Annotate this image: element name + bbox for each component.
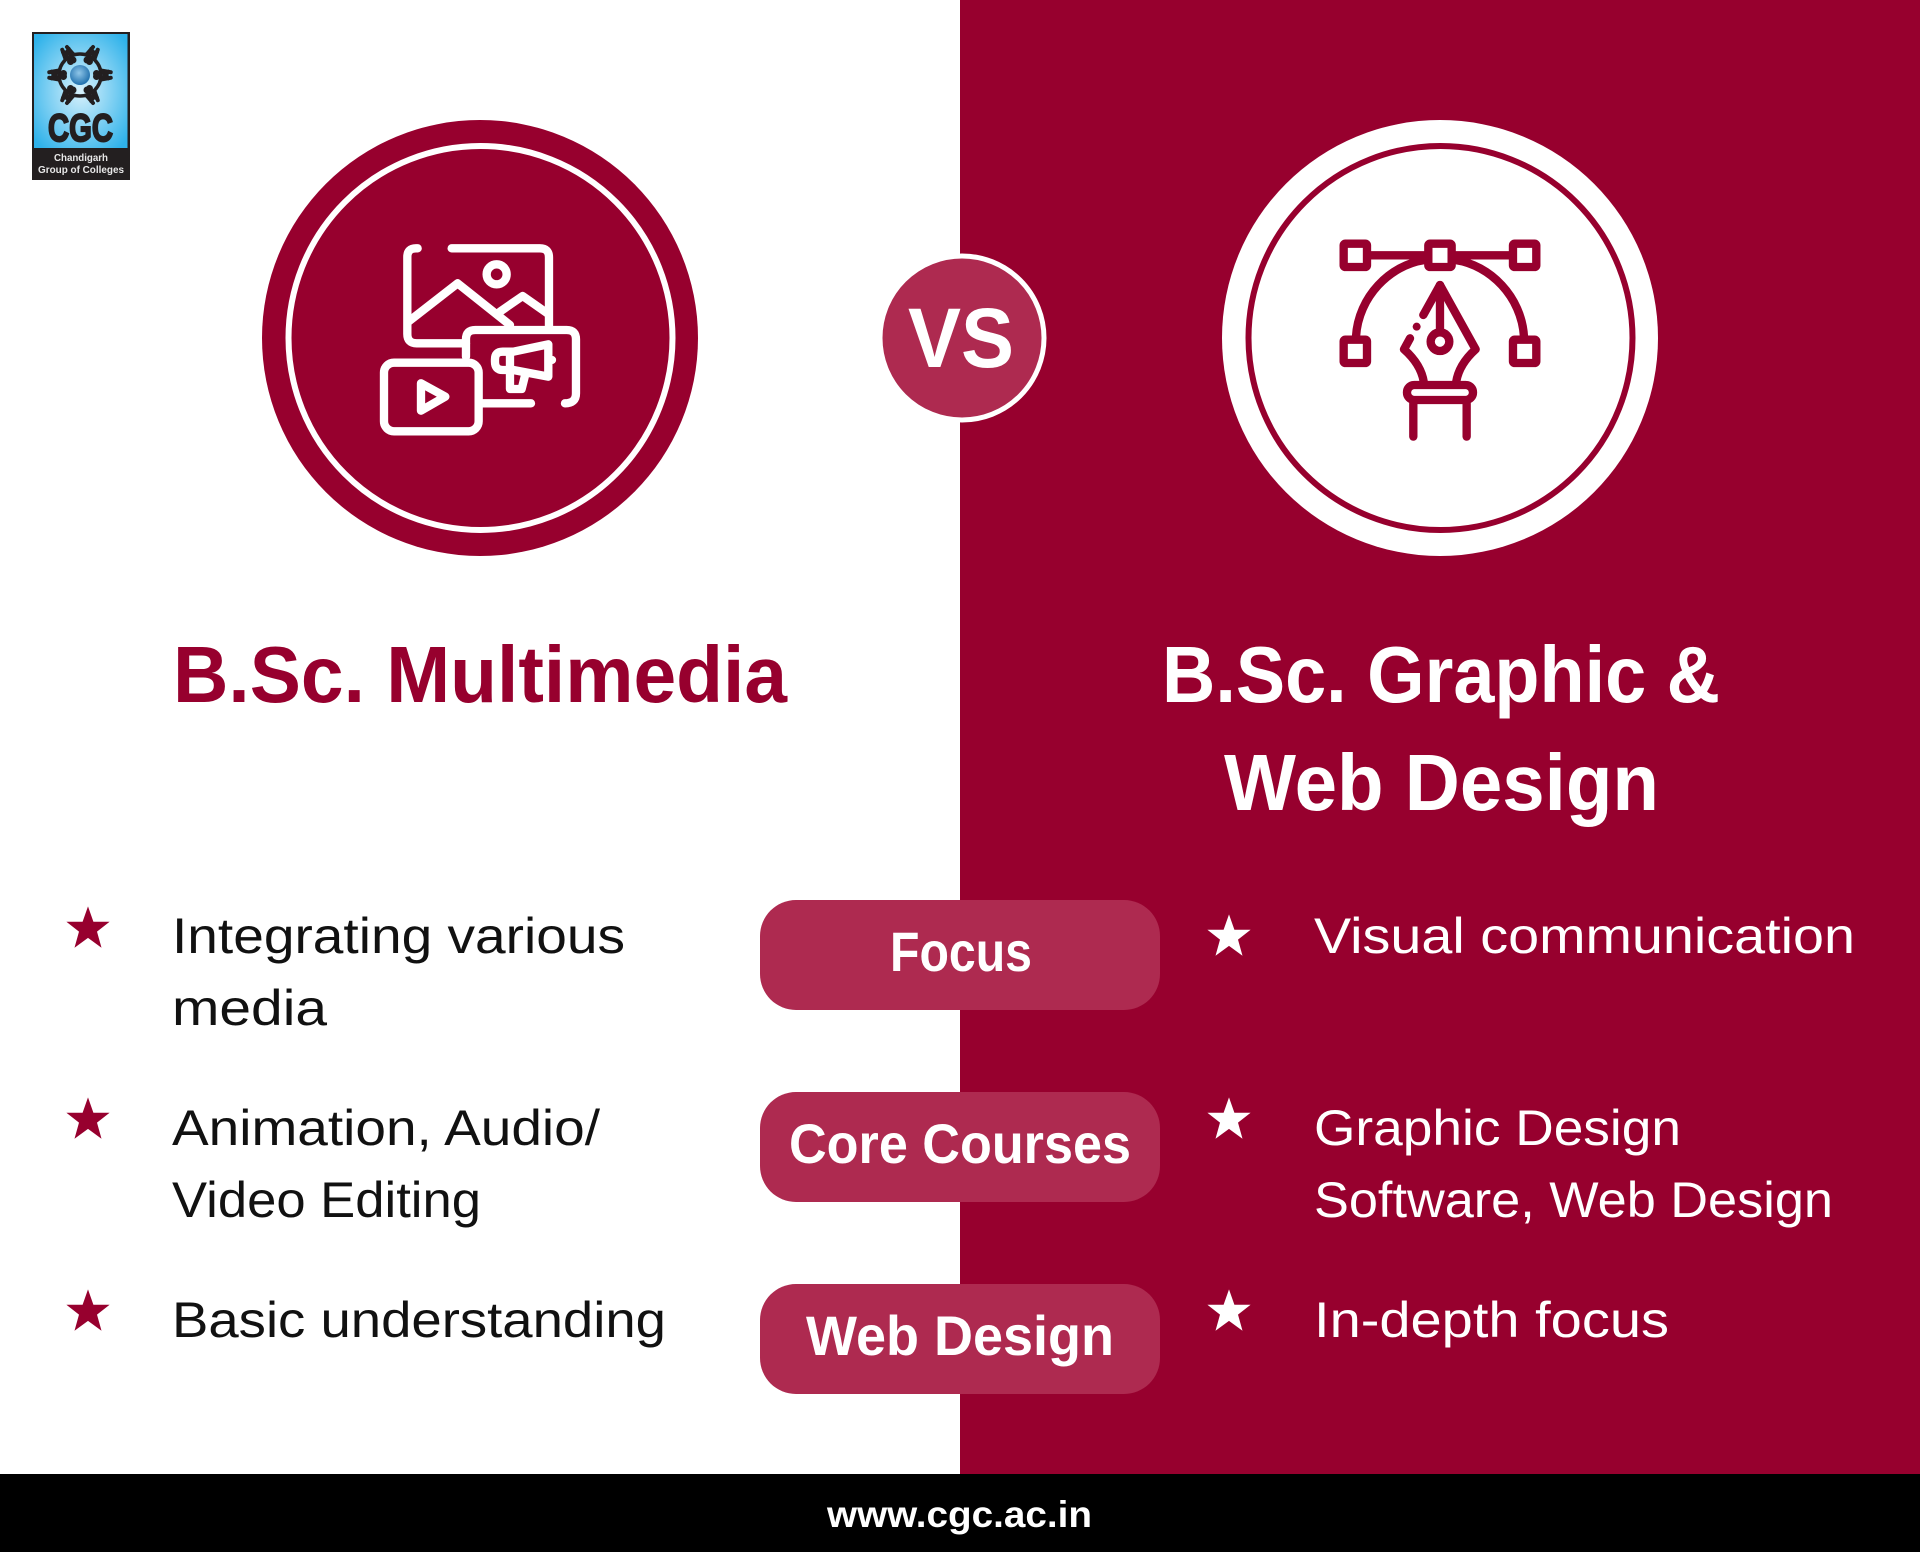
footer bar: www.cgc.ac.in xyxy=(826,1494,1092,1535)
left row: core courses: Video Editing xyxy=(172,1172,481,1228)
right row: web design: In-depth focus xyxy=(1314,1292,1669,1348)
right badge: graphic design xyxy=(1222,120,1658,556)
left row: core courses xyxy=(66,1097,600,1228)
left row: focus xyxy=(66,906,625,1036)
VS badge: VS xyxy=(908,291,1014,385)
VS badge xyxy=(880,256,1044,420)
heading: B.Sc. Graphic & Web Design: Web Design xyxy=(1224,738,1659,827)
logo: CGC: CGC xyxy=(48,107,113,150)
icon: pen tool xyxy=(1344,244,1536,437)
right row: core courses xyxy=(1207,1097,1833,1228)
heading: B.Sc. Graphic & Web Design: B.Sc. Graphic & xyxy=(1162,630,1720,719)
left row: focus: media xyxy=(172,980,327,1036)
logo: CGC xyxy=(32,32,130,180)
pill: Focus xyxy=(760,900,1160,1010)
pill: Focus: Focus xyxy=(890,920,1032,983)
right row: core courses: Software, Web Design xyxy=(1314,1172,1833,1228)
pill: Core Courses xyxy=(760,1092,1160,1202)
left badge: multimedia xyxy=(262,120,698,556)
pill: Web Design: Web Design xyxy=(806,1304,1114,1367)
pill: Core Courses: Core Courses xyxy=(789,1112,1131,1175)
pill: Web Design xyxy=(760,1284,1160,1394)
right row: focus: Visual communication xyxy=(1314,908,1855,964)
right row: core courses: Graphic Design xyxy=(1314,1100,1681,1156)
icon: multimedia xyxy=(384,248,576,431)
left row: focus: Integrating various xyxy=(172,908,625,964)
right row: web design xyxy=(1207,1289,1669,1348)
heading: B.Sc. Graphic & Web Design xyxy=(1162,630,1720,827)
left row: core courses: Animation, Audio/ xyxy=(172,1100,600,1156)
footer bar xyxy=(0,1474,1920,1552)
heading: B.Sc. Multimedia: B.Sc. Multimedia xyxy=(173,630,787,719)
left panel background xyxy=(0,0,960,1474)
logo: CGC: Chandigarh xyxy=(54,153,108,164)
right panel background xyxy=(960,0,1920,1474)
left row: web design: Basic understanding xyxy=(172,1292,666,1348)
icon: star xyxy=(66,906,110,948)
logo: CGC: Group of Colleges xyxy=(38,165,124,176)
